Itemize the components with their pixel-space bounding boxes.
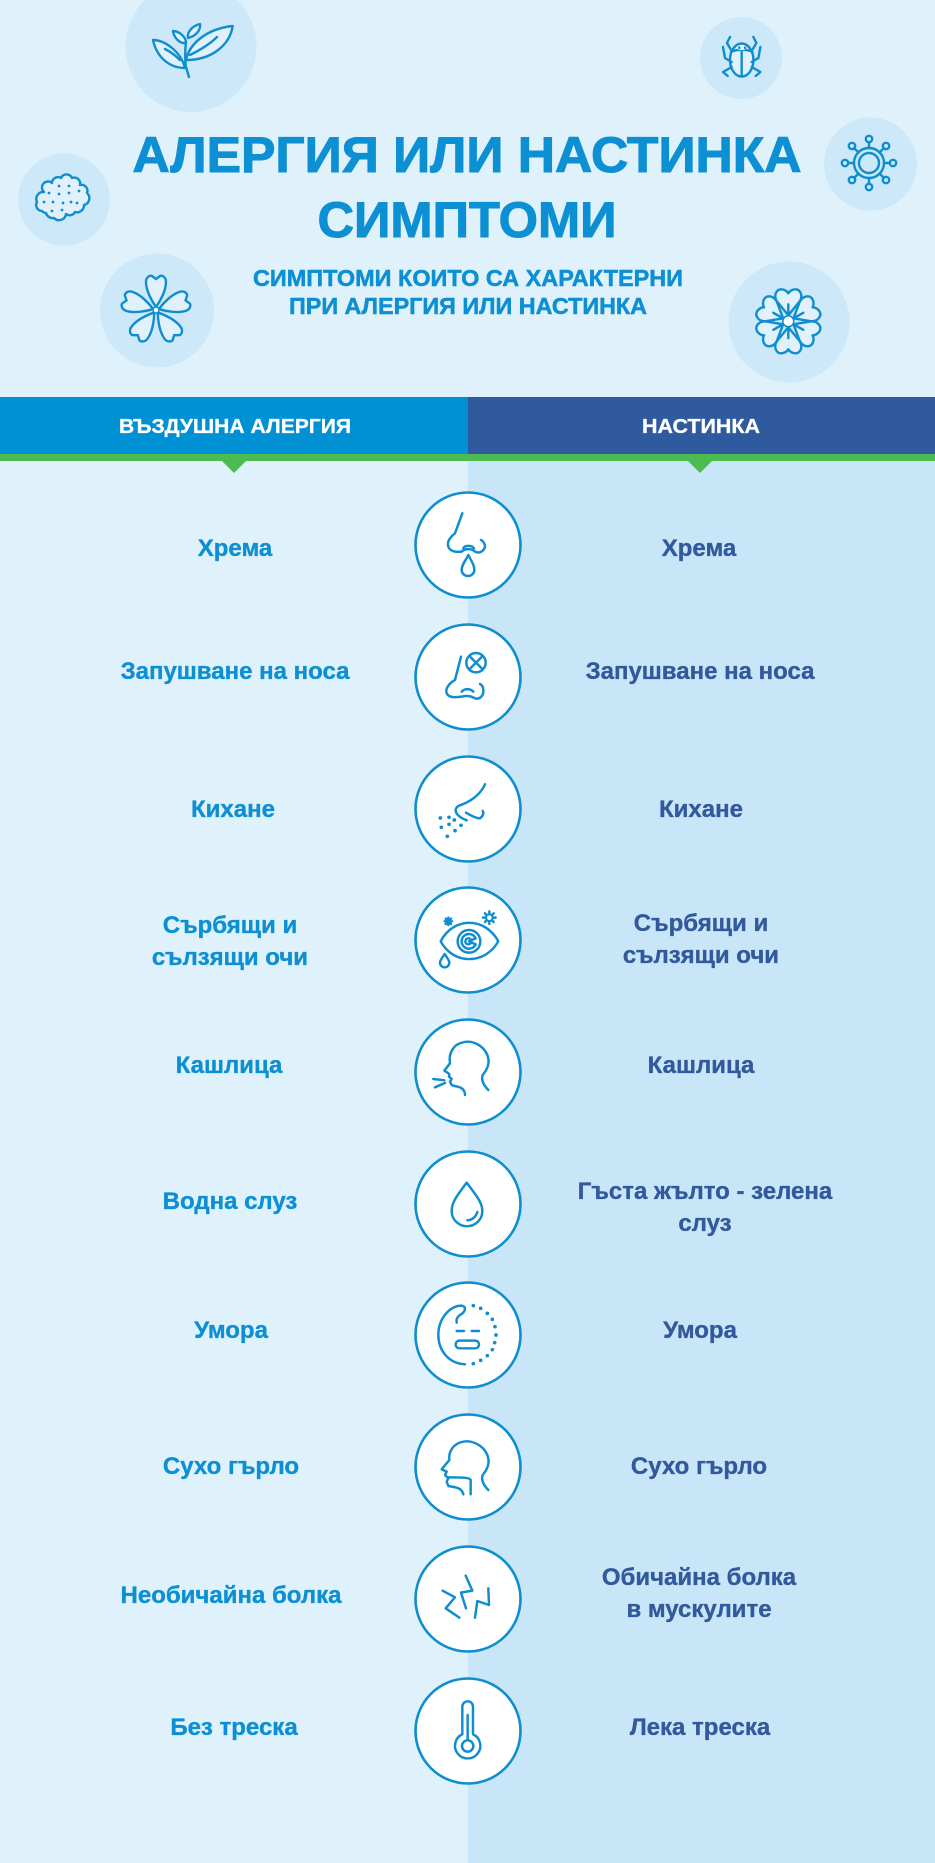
- row: cough: [176, 1020, 755, 1124]
- row: mucus: [163, 1152, 833, 1256]
- row: dry throat: Сухо гърло: [163, 1453, 299, 1480]
- row: sneezing: Кихане: [659, 796, 743, 823]
- row: mucus: Гъста жълто - зелена: [578, 1178, 833, 1205]
- row: itchy watery eyes: сълзящи очи: [623, 942, 779, 969]
- icon: coughing head: [416, 1020, 520, 1124]
- row: cough: Кашлица: [648, 1052, 755, 1079]
- icon: leaf bubble: [126, 0, 256, 112]
- row: cough: Кашлица: [176, 1052, 283, 1079]
- icon: drop: [416, 1152, 520, 1256]
- row: sneezing: [191, 756, 743, 862]
- row: stuffy nose: Запушване на носа: [121, 658, 350, 685]
- header: cold: НАСТИНКА: [642, 416, 760, 438]
- row: pain: в мускулите: [626, 1596, 772, 1623]
- row: fever: Лека треска: [630, 1714, 771, 1741]
- row: itchy watery eyes: Сърбящи и: [163, 912, 297, 939]
- row: fever: Без треска: [170, 1714, 298, 1741]
- icon: tired face: [416, 1282, 520, 1388]
- subtitle: [253, 265, 683, 319]
- row: pain: Обичайна болка: [602, 1564, 797, 1591]
- icon: beetle bubble: [700, 17, 782, 99]
- icon: sneezing nose: [416, 756, 520, 862]
- row: runny nose: Хрема: [662, 535, 737, 562]
- row: dry throat: Сухо гърло: [631, 1453, 767, 1480]
- row: fatigue: [194, 1282, 738, 1388]
- row: runny nose: Хрема: [198, 535, 273, 562]
- icon: blocked nose: [416, 624, 520, 730]
- title: АЛЕРГИЯ ИЛИ НАСТИНКА: [132, 127, 802, 183]
- icon: virus bubble: [824, 118, 917, 210]
- title: СИМПТОМИ: [318, 192, 616, 248]
- row: mucus: слуз: [678, 1210, 732, 1237]
- header: cold: [468, 397, 935, 454]
- column headers: [0, 397, 935, 473]
- row: stuffy nose: [121, 624, 815, 730]
- subtitle: СИМПТОМИ КОИТО СА ХАРАКТЕРНИ: [253, 265, 683, 291]
- green divider with arrows: [0, 454, 935, 473]
- header: airborne allergy: [0, 397, 468, 454]
- icon: five petal flower bubble: [100, 254, 214, 368]
- title: [132, 127, 802, 248]
- row: itchy watery eyes: Сърбящи и: [634, 910, 768, 937]
- row: runny nose: [198, 492, 737, 598]
- row: sneezing: Кихане: [191, 796, 275, 823]
- icon: thermometer: [416, 1678, 520, 1784]
- row: itchy watery eyes: [152, 888, 779, 992]
- row: itchy watery eyes: сълзящи очи: [152, 944, 308, 971]
- header: airborne allergy: ВЪЗДУШНА АЛЕРГИЯ: [119, 416, 351, 438]
- icon: six petal flower bubble: [728, 262, 850, 382]
- row: pain: Необичайна болка: [121, 1582, 342, 1609]
- icon: pain bolts: [416, 1546, 520, 1652]
- row: fever: [170, 1678, 771, 1784]
- subtitle: ПРИ АЛЕРГИЯ ИЛИ НАСТИНКА: [289, 293, 647, 319]
- row: dry throat: [163, 1414, 767, 1520]
- row: fatigue: Умора: [194, 1317, 269, 1344]
- row: mucus: Водна слуз: [163, 1188, 297, 1215]
- icon: runny nose: [416, 492, 520, 598]
- panel: title header: [18, 0, 917, 382]
- icon: watery eye: [416, 888, 520, 992]
- row: fatigue: Умора: [663, 1317, 738, 1344]
- icon: pollen bubble: [18, 154, 110, 246]
- row: stuffy nose: Запушване на носа: [586, 658, 815, 685]
- icon: head with throat: [416, 1414, 520, 1520]
- row: pain: [121, 1546, 797, 1652]
